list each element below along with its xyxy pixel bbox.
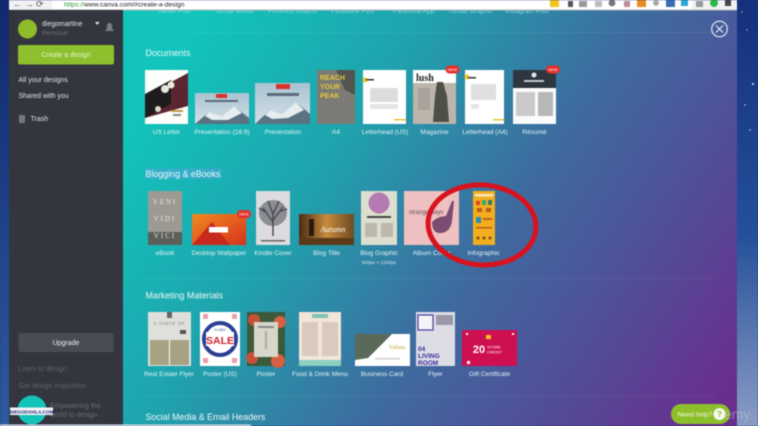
desktop background: left strip <box>0 0 10 426</box>
create a design button <box>18 45 114 64</box>
top row faded labels: Tumblr Graphic <box>448 8 493 15</box>
thumbnail: blog title <box>299 214 354 245</box>
thumbnail: real estate flyer <box>148 312 191 366</box>
marketing labels: Real Estate Flyer <box>144 371 195 378</box>
thumbnail: ebook: VICI <box>154 232 176 240</box>
marketing labels: Flyer <box>428 371 444 378</box>
thumbnail: business card <box>355 334 410 366</box>
need help button <box>671 404 730 424</box>
learn to design link: Learn to design <box>18 366 67 373</box>
trash link <box>19 115 48 123</box>
video progress bar <box>0 424 251 426</box>
thumbnail: poster us: SALE <box>206 335 234 347</box>
documents labels: Magazine <box>420 129 449 136</box>
badge: wallpaper new <box>237 210 251 218</box>
top row faded labels: Pinterest Graphic <box>268 8 319 15</box>
watermark label: DIEGODAVILA.COM <box>10 409 53 414</box>
address bar url: https://www.canva.com/#create-a-design <box>64 2 185 8</box>
blogging labels <box>156 250 500 257</box>
thumbnail: album cover <box>404 191 459 245</box>
marketing labels: Gift Certificate <box>469 371 510 378</box>
thumbnail: poster us: FLASH <box>214 328 226 332</box>
account name: diegomartine <box>42 21 83 28</box>
thumbnail: business card: Yafana <box>389 344 406 351</box>
blog graphic size label: 800px × 1200px <box>362 260 397 266</box>
get design inspiration link: Get design inspiration <box>18 383 86 390</box>
thumbnail: gift certificate: CREDIT <box>487 350 502 354</box>
documents labels: Letterhead (US) <box>362 129 408 136</box>
thumbnail: gift certificate: STORE <box>487 344 501 350</box>
badge: magazine new: NEW <box>448 67 457 72</box>
thumbnail: poster <box>246 312 286 368</box>
blogging labels: Blog Graphic <box>360 250 399 257</box>
thumbnail: poster us <box>200 312 240 366</box>
documents labels: Presentation <box>265 129 302 136</box>
red hand-drawn circle annotation <box>425 181 539 269</box>
badge: magazine new <box>446 66 460 74</box>
thumbnail: real estate flyer: A TASTE OF <box>154 321 185 326</box>
thumbnail: presentation 16:9 <box>195 93 249 124</box>
thumbnail: a4: REACH <box>320 75 345 82</box>
notification bell <box>105 23 114 31</box>
heading: documents: Documents <box>146 48 191 58</box>
canva tagline: Empowering the <box>50 403 101 410</box>
marketing labels: Poster <box>257 371 276 378</box>
thumbnail: resume <box>513 70 556 124</box>
thumbnail: infographic <box>473 191 495 245</box>
all your designs link: All your designs <box>18 77 68 84</box>
top row faded labels: Instagram Post <box>505 8 549 15</box>
need help button: ? <box>717 410 722 419</box>
documents labels <box>153 129 547 136</box>
thumbnail: letterhead us <box>362 70 406 124</box>
marketing labels: Poster (US) <box>203 371 237 378</box>
account plan: Personal <box>42 30 68 37</box>
top row faded labels: Twitter Post <box>157 8 191 15</box>
canva logo circle <box>18 396 46 424</box>
top row faded labels: Facebook App <box>393 8 435 15</box>
thumbnail: us letter <box>145 70 188 124</box>
thumbnail: magazine <box>413 70 456 124</box>
thumbnail: ebook: VENI <box>153 198 177 206</box>
badge: resume new <box>546 66 560 74</box>
blogging labels: Kindle Cover <box>254 250 292 257</box>
blogging labels: Desktop Wallpaper <box>192 250 247 257</box>
thumbnail: a4: PEAK <box>320 93 339 100</box>
thumbnail: kindle cover <box>256 191 290 245</box>
thumbnail: magazine: lush <box>416 73 434 84</box>
documents labels: A4 <box>332 129 340 136</box>
create a design button: Create a design <box>41 52 91 59</box>
blogging labels: eBook <box>156 250 175 257</box>
thumbnail: blog graphic <box>361 191 397 245</box>
heading: marketing materials: Marketing Materials <box>146 290 223 300</box>
desktop background: right strip <box>737 0 758 426</box>
sidebar <box>9 10 123 426</box>
blogging labels: Infographic <box>467 250 500 257</box>
trash link: Trash <box>30 116 48 123</box>
marketing labels: Business Card <box>361 371 404 378</box>
thumbnail: ebook <box>148 191 182 245</box>
documents labels: US Letter <box>153 129 181 136</box>
thumbnail: flyer: ROOM <box>418 360 438 367</box>
documents labels: Résumé <box>522 129 547 136</box>
thumbnail: gift certificate <box>462 330 517 366</box>
documents labels: Presentation (16:9) <box>194 129 250 136</box>
thumbnail: flyer: 04 <box>418 346 425 353</box>
marketing labels <box>144 371 510 378</box>
top row faded labels: Facebook Post <box>331 8 375 15</box>
thumbnail: flyer: LIVING <box>418 353 440 360</box>
top row faded labels: Social Media <box>216 8 254 15</box>
thumbnail: food and drink menu <box>299 312 341 366</box>
upgrade button <box>18 333 114 352</box>
udemy watermark: emy <box>724 406 750 422</box>
browser toolbar <box>9 0 737 10</box>
blogging labels: Blog Title <box>313 250 340 257</box>
thumbnail: flyer <box>416 312 455 367</box>
thumbnail: a4 <box>317 70 355 124</box>
thumbnail: presentation <box>255 83 310 124</box>
extension icons <box>550 0 731 7</box>
heading: social media and email headers: Social Media & Email Headers <box>146 412 266 422</box>
shared with you link: Shared with you <box>18 93 69 100</box>
thumbnail: gift certificate: 20 <box>473 344 485 356</box>
avatar <box>18 20 37 38</box>
canva tagline: world to design <box>49 412 97 419</box>
divider <box>145 31 715 34</box>
watermark label <box>10 408 53 415</box>
thumbnail: blog title: Autumn <box>320 225 345 234</box>
badge: wallpaper new: NEW <box>239 212 249 217</box>
blogging labels: Album Cover <box>413 250 451 257</box>
documents labels: Letterhead (A4) <box>462 129 508 136</box>
thumbnail: album cover: strange days <box>409 210 443 216</box>
thumbnail: a4: YOUR <box>320 84 340 91</box>
close button <box>712 21 727 37</box>
thumbnail: letterhead a4 <box>464 70 504 124</box>
heading: blogging and ebooks (highlighted): Blogging & eBooks <box>146 169 221 179</box>
dropdown arrow <box>95 22 100 25</box>
marketing labels: Food & Drink Menu <box>292 371 348 378</box>
thumbnail: ebook: VIDI <box>154 215 176 223</box>
upgrade button: Upgrade <box>53 340 80 347</box>
badge: resume new: NEW <box>548 67 558 72</box>
thumbnail: desktop wallpaper <box>192 214 246 245</box>
need help button: Need help? <box>678 412 712 418</box>
main gradient panel <box>123 10 737 426</box>
